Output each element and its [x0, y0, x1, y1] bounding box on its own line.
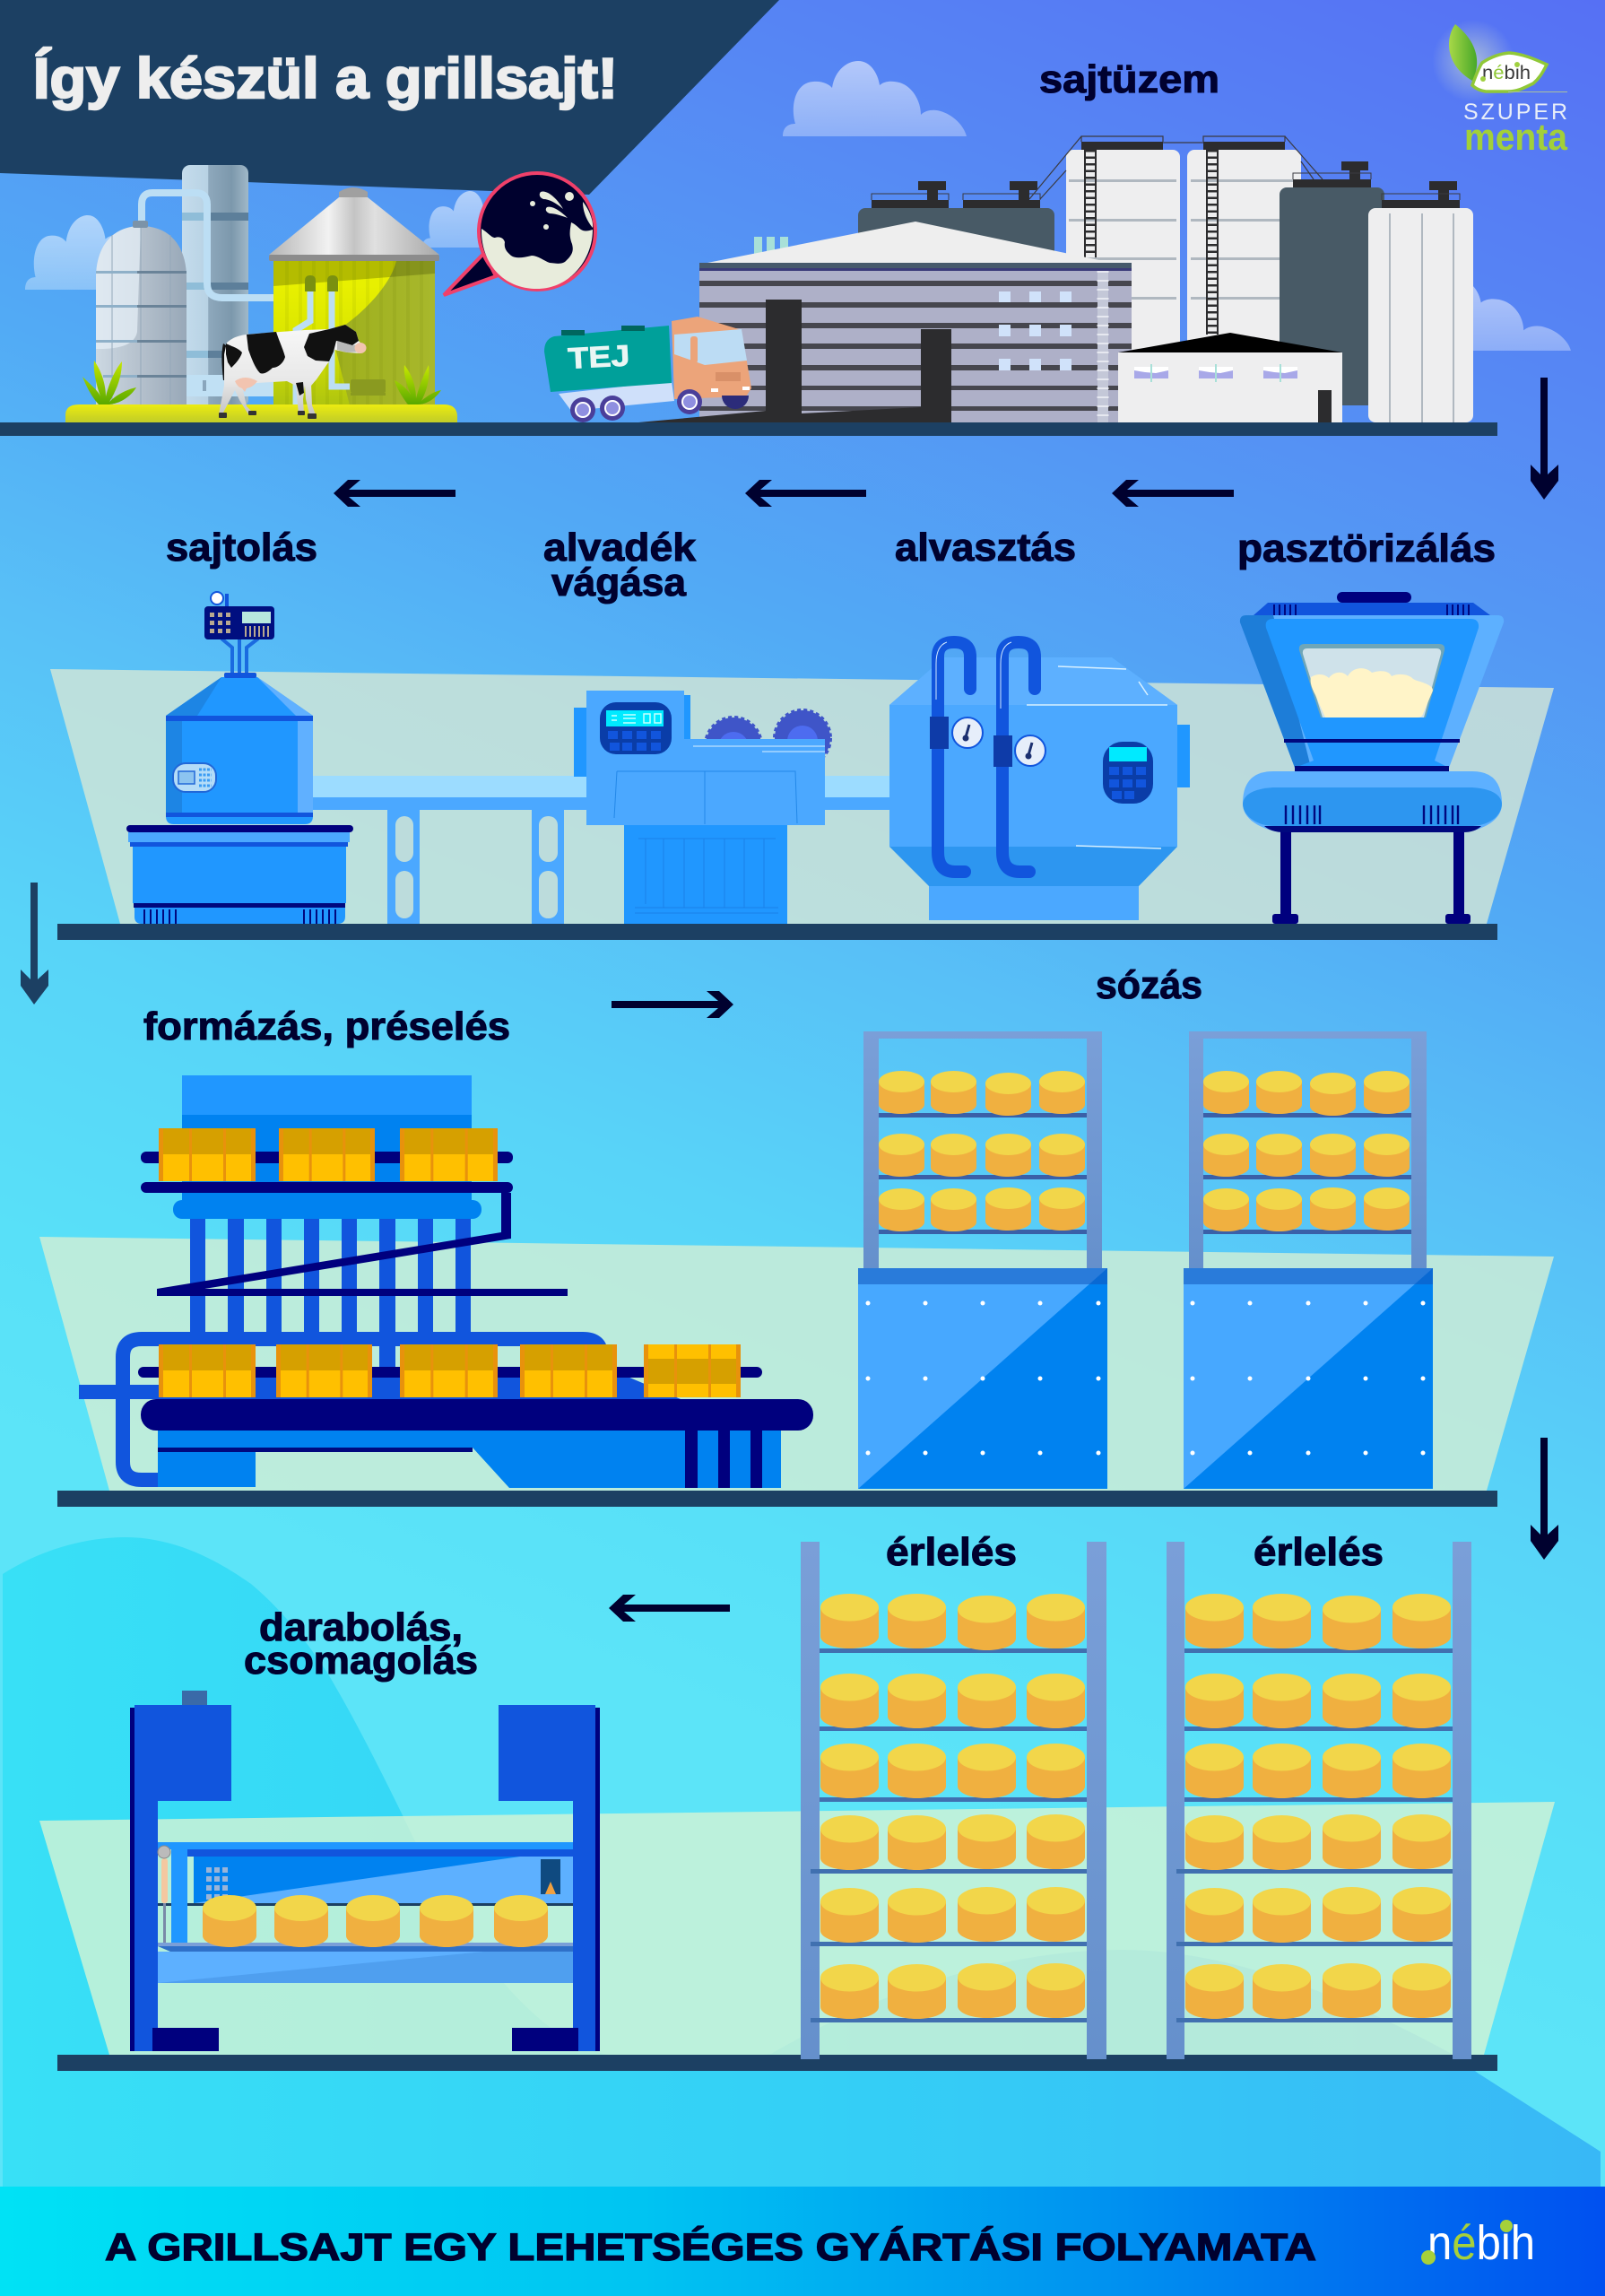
salting rack 2: [1189, 1031, 1427, 1268]
icon: cloud behind silo: [422, 191, 539, 248]
arrow left 2: [745, 480, 866, 507]
title banner: [0, 0, 779, 195]
lawn: [65, 404, 457, 422]
panel: row 3 shaping and salting: [39, 963, 1554, 1507]
arrow left 4: [609, 1595, 730, 1622]
arrow left 3: [1112, 480, 1234, 507]
panel: row 2 processing: [50, 526, 1554, 940]
icon: cloud right: [1381, 280, 1571, 351]
arrow right: [612, 991, 733, 1018]
arrow down left: [21, 883, 48, 1004]
farm silos: [96, 165, 439, 407]
icon: cow: [219, 325, 366, 419]
machine: coagulation vat: [889, 642, 1190, 920]
floor 2: [57, 924, 1497, 940]
machine: moulding press: [79, 1075, 813, 1488]
brine tank 1: [858, 1268, 1107, 1489]
salting rack 1: [863, 1031, 1102, 1268]
heading: alvadék vágása: alvadék: [543, 526, 697, 570]
logo: Szuper Menta: menta: [1464, 116, 1568, 158]
logo: Szuper Menta: nébih: [1482, 63, 1531, 83]
heading: sózás: sózás: [1096, 963, 1202, 1007]
machine: curd cutter: [574, 691, 830, 924]
connecting conveyor: [313, 776, 892, 924]
heading: darabolás, csomagolás: darabolás,: [259, 1605, 463, 1649]
floor 3: [57, 1491, 1497, 1507]
icon: cloud top: [783, 61, 967, 136]
logo: nébih: nébih: [1427, 2216, 1535, 2270]
heading: formázás, préselés: formázás, préselés: [143, 1004, 510, 1048]
heading: darabolás, csomagolás: [244, 1605, 478, 1683]
ripening rack 2: [1167, 1542, 1471, 2059]
panel: farm and dairy scene: [0, 0, 1571, 436]
footer title: A GRILLSAJT EGY LEHETSÉGES GYÁRTÁSI FOLYAMATA: [105, 2226, 1316, 2269]
heading: sajtolás: sajtolás: [166, 526, 317, 570]
machine: pasteurizer: [1240, 592, 1504, 924]
arrow down right 2: [1531, 1438, 1558, 1560]
heading: érlelés 2: érlelés: [1254, 1530, 1384, 1574]
logo: Szuper Menta: SZUPER: [1463, 100, 1567, 125]
brine tank 2: [1184, 1268, 1433, 1489]
heading: darabolás, csomagolás: csomagolás: [244, 1639, 478, 1683]
heading: sajtüzem: sajtüzem: [1039, 57, 1219, 101]
heading: alvasztás: alvasztás: [895, 526, 1076, 570]
heading: érlelés 1: érlelés: [886, 1530, 1017, 1574]
icon: grass left: [82, 361, 136, 404]
label: TEJ: TEJ: [567, 338, 630, 375]
footer banner: [0, 2187, 1605, 2296]
arrow left 1: [334, 480, 455, 507]
ripening rack 1: [801, 1542, 1106, 2059]
floor 4: [57, 2055, 1497, 2071]
panel: row 4 ripening and packaging: [39, 1530, 1555, 2071]
milk bubble: [444, 173, 595, 295]
title: Így készül a grillsajt!: [33, 48, 618, 110]
milk truck: [544, 317, 751, 422]
machine: press tank: [126, 592, 353, 924]
heading: pasztörizálás: pasztörizálás: [1237, 526, 1496, 570]
arrow down right 1: [1531, 378, 1558, 500]
logo: Szuper Menta: [1432, 20, 1568, 158]
icon: grass right: [395, 365, 441, 404]
floor 1: [0, 422, 1497, 436]
machine: packaging: [130, 1691, 600, 2051]
heading: alvadék vágása: vágása: [551, 561, 687, 604]
dairy plant: [638, 136, 1473, 422]
icon: cloud left: [25, 215, 178, 290]
heading: alvadék vágása: [543, 526, 697, 604]
